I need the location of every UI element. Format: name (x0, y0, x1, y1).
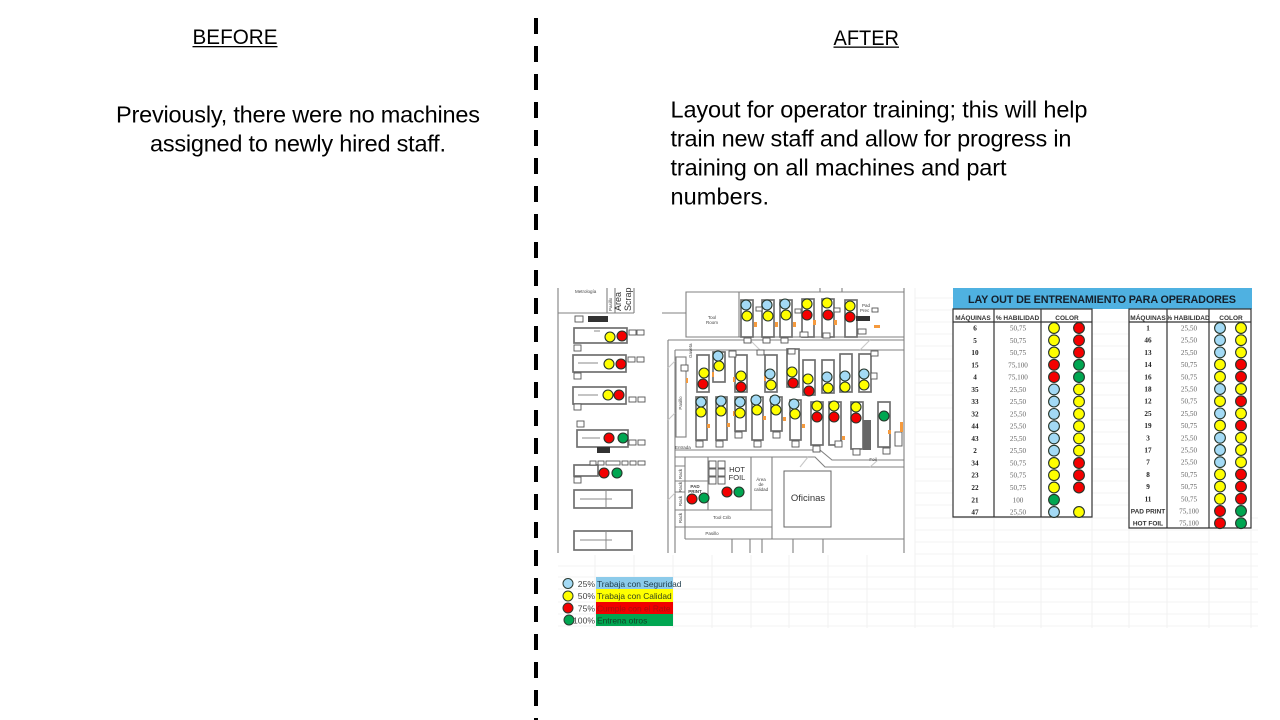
text block: after description: Layout for operator training; this will help (670, 96, 1088, 122)
divider: dashed vertical line (534, 18, 538, 720)
table: right machine list: 50,75 (1181, 483, 1197, 491)
text block: after description (670, 96, 1088, 210)
hot foil storage boxes (709, 461, 725, 484)
room labels: calidad (754, 487, 769, 492)
table: right machine list: 75,100 (1179, 520, 1199, 528)
room labels: Gaveta (688, 343, 693, 358)
table: right machine list: 25,50 (1181, 410, 1197, 418)
table: right machine list (1129, 309, 1251, 529)
legend row: 100%: Entrena otros (597, 616, 647, 626)
table: right machine list: 50,75 (1181, 373, 1197, 381)
table: left machine list: MÁQUINAS (955, 313, 991, 322)
oficinas room (784, 471, 831, 527)
oficinas room: Oficinas (791, 493, 825, 504)
table: right machine list: 17 (1144, 446, 1152, 454)
table: left machine list: 22 (971, 484, 979, 492)
table: right machine list: 25,50 (1181, 446, 1197, 454)
table: right machine list: 9 (1146, 483, 1150, 491)
table: right machine list: 50,75 (1181, 471, 1197, 479)
left machines row (573, 316, 645, 550)
table: right machine list: MÁQUINAS (1130, 313, 1166, 322)
skill status markers on machines (599, 298, 889, 504)
table: right machine list: 14 (1144, 361, 1152, 369)
text block: before description (116, 102, 480, 156)
table: left machine list: 47 (971, 508, 979, 516)
text block: after description: numbers. (670, 184, 769, 210)
room labels: Foil (869, 457, 877, 462)
left table status circles (1049, 323, 1084, 517)
table: left machine list: 43 (971, 435, 979, 443)
legend row: 75%: 75% (578, 604, 595, 614)
legend row: 25% (563, 577, 682, 589)
table: left machine list: 100 (1013, 496, 1024, 504)
table: right machine list: 8 (1146, 471, 1150, 479)
room labels: Rack (678, 495, 683, 506)
table: right machine list: PAD PRINT (1131, 508, 1165, 516)
table: right machine list: 25,50 (1181, 459, 1197, 467)
table: right machine list: 18 (1144, 386, 1152, 394)
table: right machine list: 25,50 (1181, 434, 1197, 442)
floor plan: plant layout (558, 287, 904, 553)
table: left machine list: 15 (971, 361, 979, 369)
text block: before description: assigned to newly hired staff. (150, 130, 446, 156)
room labels: Scrap (623, 287, 633, 311)
table: right machine list: 50,75 (1181, 495, 1197, 503)
room labels: Rack (678, 481, 683, 492)
table: left machine list: COLOR (1055, 315, 1079, 322)
table: left machine list: 10 (971, 349, 979, 357)
room labels: Pasillo (608, 297, 613, 311)
table: left machine list: 25,50 (1010, 423, 1026, 431)
table: right machine list: 50,75 (1181, 422, 1197, 430)
table: right machine list: COLOR (1219, 315, 1243, 322)
table title bar (953, 288, 1252, 309)
table: right machine list: 75,100 (1179, 508, 1199, 516)
room labels: Tool Crib (713, 515, 731, 520)
room labels: Pasillo (678, 396, 683, 410)
table: left machine list: 6 (973, 324, 977, 332)
room labels: Rack (678, 468, 683, 479)
room labels: Pasillo (705, 531, 719, 536)
room labels: Rack (678, 512, 683, 523)
legend row: 25%: 25% (578, 579, 595, 589)
spreadsheet background grid (558, 288, 1258, 628)
table: left machine list: 25,50 (1010, 398, 1026, 406)
table: left machine list: 44 (971, 423, 979, 431)
table: right machine list: 50,75 (1181, 361, 1197, 369)
room labels: Pad (862, 303, 871, 308)
table: right machine list: 13 (1144, 349, 1152, 357)
table: right machine list: 25 (1144, 410, 1152, 418)
heading: before: BEFORE (192, 26, 278, 49)
table: left machine list: % HABILIDAD (996, 315, 1039, 322)
table: left machine list: 50,75 (1010, 472, 1026, 480)
table: left machine list: 25,50 (1010, 410, 1026, 418)
table: right machine list: 12 (1144, 398, 1152, 406)
table: left machine list: 50,75 (1010, 460, 1026, 468)
table: right machine list: 46 (1144, 337, 1152, 345)
table: right machine list: 11 (1145, 495, 1152, 503)
room labels: Prec (860, 308, 870, 313)
table: left machine list: 33 (971, 398, 979, 406)
table: left machine list: 50,75 (1010, 349, 1026, 357)
table: left machine list: 75,100 (1008, 374, 1028, 382)
table: left machine list: 34 (971, 460, 979, 468)
room labels: HOT (729, 465, 745, 474)
room labels: Entrada (675, 445, 691, 450)
production machines (681, 299, 903, 455)
table: right machine list: HOT FOIL (1133, 521, 1163, 528)
table: left machine list: 23 (971, 472, 979, 480)
building walls and rooms (558, 288, 904, 553)
legend row: 50% (563, 589, 673, 602)
table: right machine list: 1 (1146, 324, 1150, 332)
table title bar: LAY OUT DE ENTRENAMIENTO PARA OPERADORES (968, 294, 1236, 306)
legend row: 50%: Trabaja con Calidad (597, 591, 672, 601)
room labels: Metrología (575, 289, 597, 294)
table: left machine list: 50,75 (1010, 324, 1026, 332)
table: left machine list (953, 309, 1092, 517)
table: right machine list: 25,50 (1181, 337, 1197, 345)
table: right machine list: % HABILIDAD (1166, 315, 1210, 322)
legend row: 25%: Trabaja con Seguridad (597, 579, 682, 589)
table: left machine list: 25,50 (1010, 435, 1026, 443)
legend row: 75%: Cumple con el Rate (597, 604, 671, 614)
table: right machine list: 19 (1144, 422, 1152, 430)
table: left machine list: 50,75 (1010, 337, 1026, 345)
room labels: PRINT (688, 489, 702, 494)
room labels: Room (706, 320, 718, 325)
legend row: 75% (563, 602, 673, 614)
room labels (575, 287, 877, 536)
room labels: FOIL (729, 473, 745, 482)
text block: before description: Previously, there were no machines (116, 102, 480, 128)
legend row: 100%: 100% (573, 616, 595, 626)
table: left machine list: 21 (971, 496, 979, 504)
table: left machine list: 75,100 (1008, 361, 1028, 369)
table: left machine list: 25,50 (1010, 386, 1026, 394)
legend row: 100% (564, 614, 673, 626)
right table status circles (1215, 323, 1246, 529)
heading: after: AFTER (834, 27, 899, 50)
room labels: PAD (690, 484, 700, 489)
table: right machine list: 25,50 (1181, 386, 1197, 394)
room labels: Tool (708, 315, 716, 320)
table: left machine list: 35 (971, 386, 979, 394)
text block: after description: training on all machines and part (670, 154, 1007, 180)
table: left machine list: 5 (973, 337, 977, 345)
table: left machine list: 25,50 (1010, 508, 1026, 516)
table: right machine list: 7 (1146, 459, 1150, 467)
table: right machine list: 3 (1146, 434, 1150, 442)
room labels: Área (756, 476, 766, 482)
room labels: Area (613, 292, 623, 311)
table: left machine list: 25,50 (1010, 447, 1026, 455)
legend row: 50%: 50% (578, 591, 595, 601)
table: left machine list: 32 (971, 410, 979, 418)
legend: skill levels (563, 577, 682, 626)
table: right machine list: 25,50 (1181, 324, 1197, 332)
text block: after description: train new staff and allow for progress in (670, 126, 1072, 152)
table: right machine list: 50,75 (1181, 398, 1197, 406)
table: right machine list: 16 (1144, 373, 1152, 381)
table: left machine list: 50,75 (1010, 484, 1026, 492)
table: left machine list: 4 (973, 374, 977, 382)
room labels: de (758, 482, 764, 487)
table: left machine list: 2 (973, 447, 977, 455)
table: right machine list: 25,50 (1181, 349, 1197, 357)
